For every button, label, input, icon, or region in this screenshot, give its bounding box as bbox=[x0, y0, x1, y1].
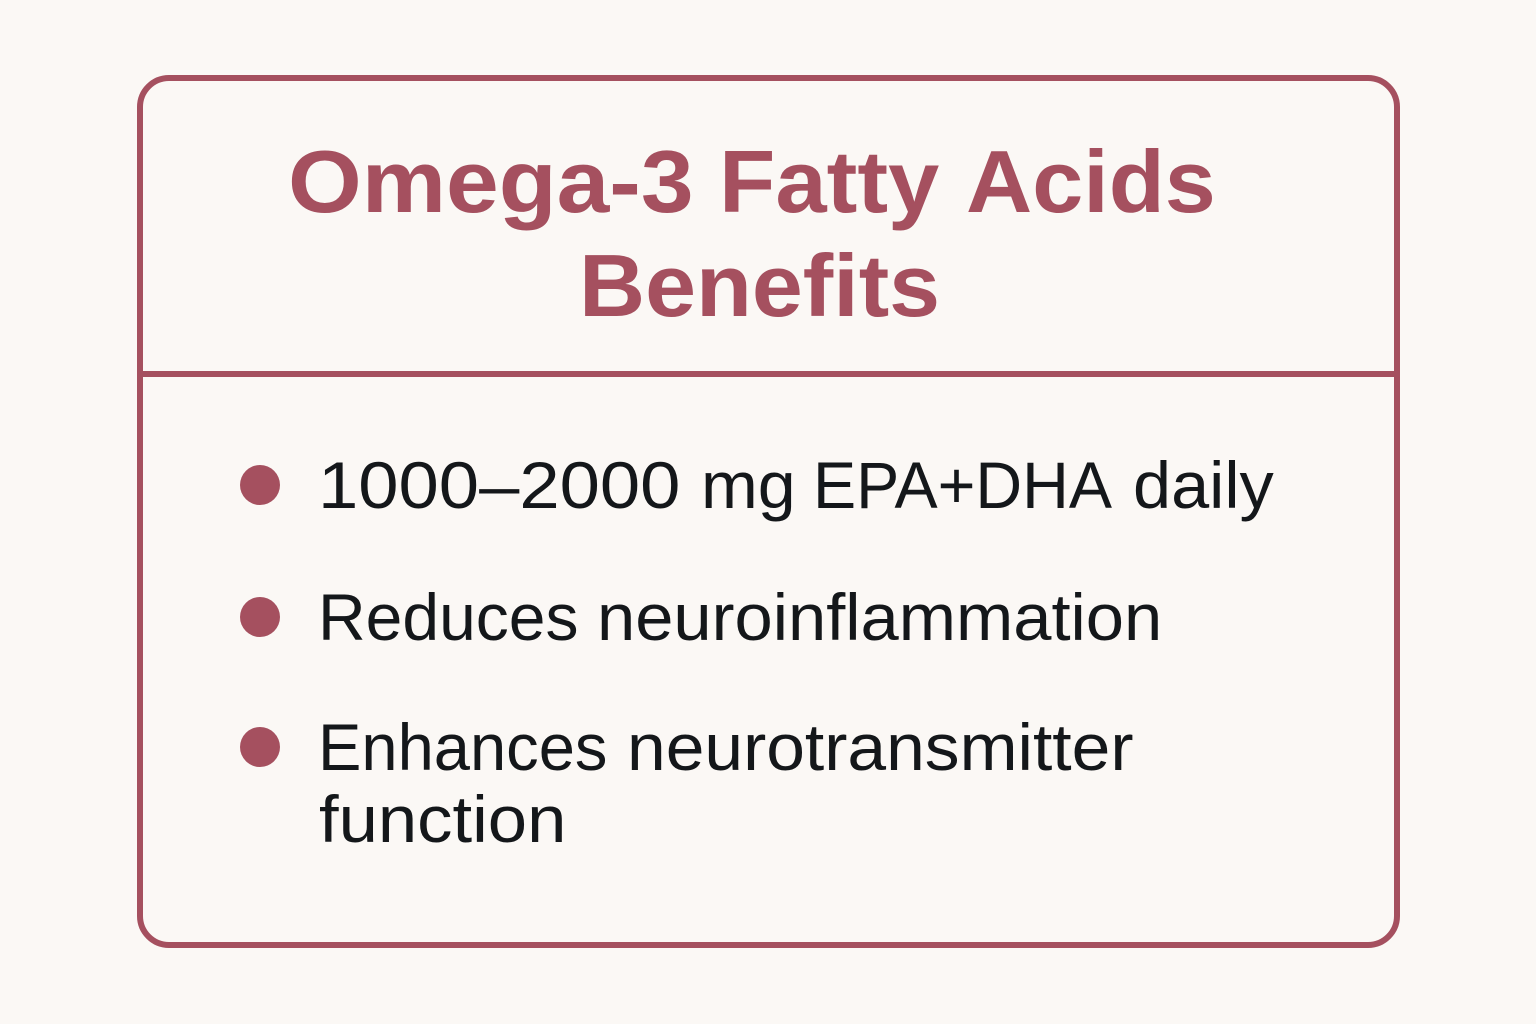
title: Omega-3 bbox=[288, 132, 694, 231]
benefit item: dosage: mg bbox=[701, 448, 795, 522]
benefit item: dosage bbox=[240, 448, 1274, 522]
benefit item: dosage: daily bbox=[1133, 448, 1274, 522]
benefit item: neurotransmitter function: neurotransmitter bbox=[627, 710, 1133, 784]
benefit item: neurotransmitter function: function bbox=[319, 782, 566, 856]
title: Acids bbox=[966, 132, 1215, 231]
benefit item: neuroinflammation bbox=[240, 580, 1162, 654]
benefit item: dosage: 1000–2000 bbox=[318, 448, 680, 522]
benefit item: neurotransmitter function: Enhances bbox=[318, 710, 607, 784]
benefit item: neurotransmitter function bbox=[240, 710, 1133, 856]
benefit item: neuroinflammation: neuroinflammation bbox=[597, 580, 1162, 654]
panel: card outline bbox=[137, 75, 1400, 948]
title: Fatty bbox=[719, 132, 939, 231]
benefit item: dosage: EPA+DHA bbox=[813, 448, 1112, 522]
title: Benefits bbox=[579, 236, 940, 335]
benefit item: neuroinflammation: Reduces bbox=[318, 580, 578, 654]
title bbox=[288, 132, 1215, 335]
